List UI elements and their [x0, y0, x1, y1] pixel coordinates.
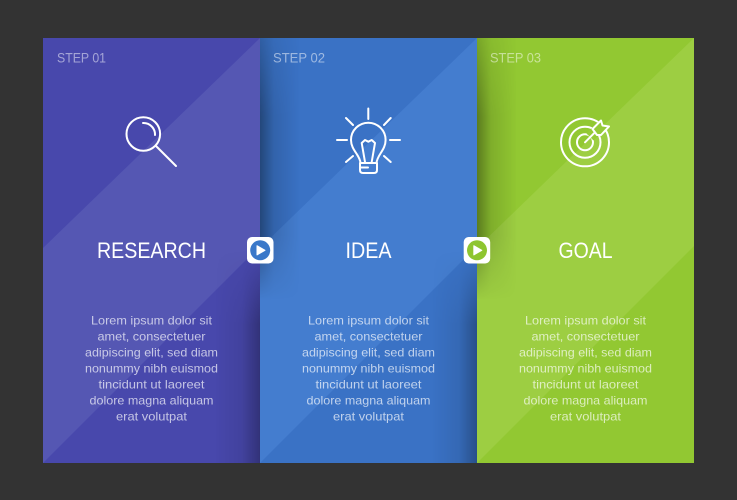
- text block: idea: adipiscing elit, sed diam: [302, 346, 435, 360]
- text block: goal: adipiscing elit, sed diam: [519, 346, 652, 360]
- icon: magnifying glass: [126, 117, 176, 166]
- text block: goal: nonummy nibh euismod: [519, 362, 652, 376]
- panel: research: [43, 38, 260, 463]
- text block: idea: [302, 314, 435, 424]
- panel: idea: [260, 38, 477, 463]
- heading: idea: IDEA: [346, 238, 392, 263]
- text block: goal: amet, consectetuer: [532, 330, 640, 344]
- text block: goal: tincidunt ut laoreet: [532, 378, 639, 392]
- text block: research: amet, consectetuer: [98, 330, 206, 344]
- heading: research: RESEARCH: [97, 238, 206, 263]
- text block: research: Lorem ipsum dolor sit: [91, 314, 213, 328]
- panel: goal: [477, 38, 694, 463]
- text block: goal: erat volutpat: [550, 410, 622, 424]
- text block: research: erat volutpat: [116, 410, 188, 424]
- text block: goal: dolore magna aliquam: [524, 394, 648, 408]
- text block: goal: [519, 314, 652, 424]
- text block: research: tincidunt ut laoreet: [98, 378, 205, 392]
- text block: research: nonummy nibh euismod: [85, 362, 218, 376]
- heading: goal: GOAL: [558, 238, 612, 263]
- text block: research: dolore magna aliquam: [90, 394, 214, 408]
- arrow button: idea to goal: [464, 237, 490, 264]
- text block: idea: tincidunt ut laoreet: [316, 378, 422, 392]
- text block: research: adipiscing elit, sed diam: [85, 346, 218, 360]
- label: step 03: STEP 03: [490, 50, 541, 66]
- label: step 02: STEP 02: [273, 50, 325, 66]
- icon: target with arrow: [561, 118, 609, 166]
- label: step 01: STEP 01: [57, 50, 106, 66]
- text block: idea: erat volutpat: [333, 410, 405, 424]
- text block: idea: nonummy nibh euismod: [302, 362, 435, 376]
- text block: idea: amet, consectetuer: [314, 330, 422, 344]
- text block: goal: Lorem ipsum dolor sit: [525, 314, 647, 328]
- text block: idea: dolore magna aliquam: [306, 394, 430, 408]
- icon: light bulb: [337, 108, 400, 173]
- text block: idea: Lorem ipsum dolor sit: [308, 314, 430, 328]
- text block: research: [85, 314, 218, 424]
- arrow button: research to idea: [247, 237, 274, 264]
